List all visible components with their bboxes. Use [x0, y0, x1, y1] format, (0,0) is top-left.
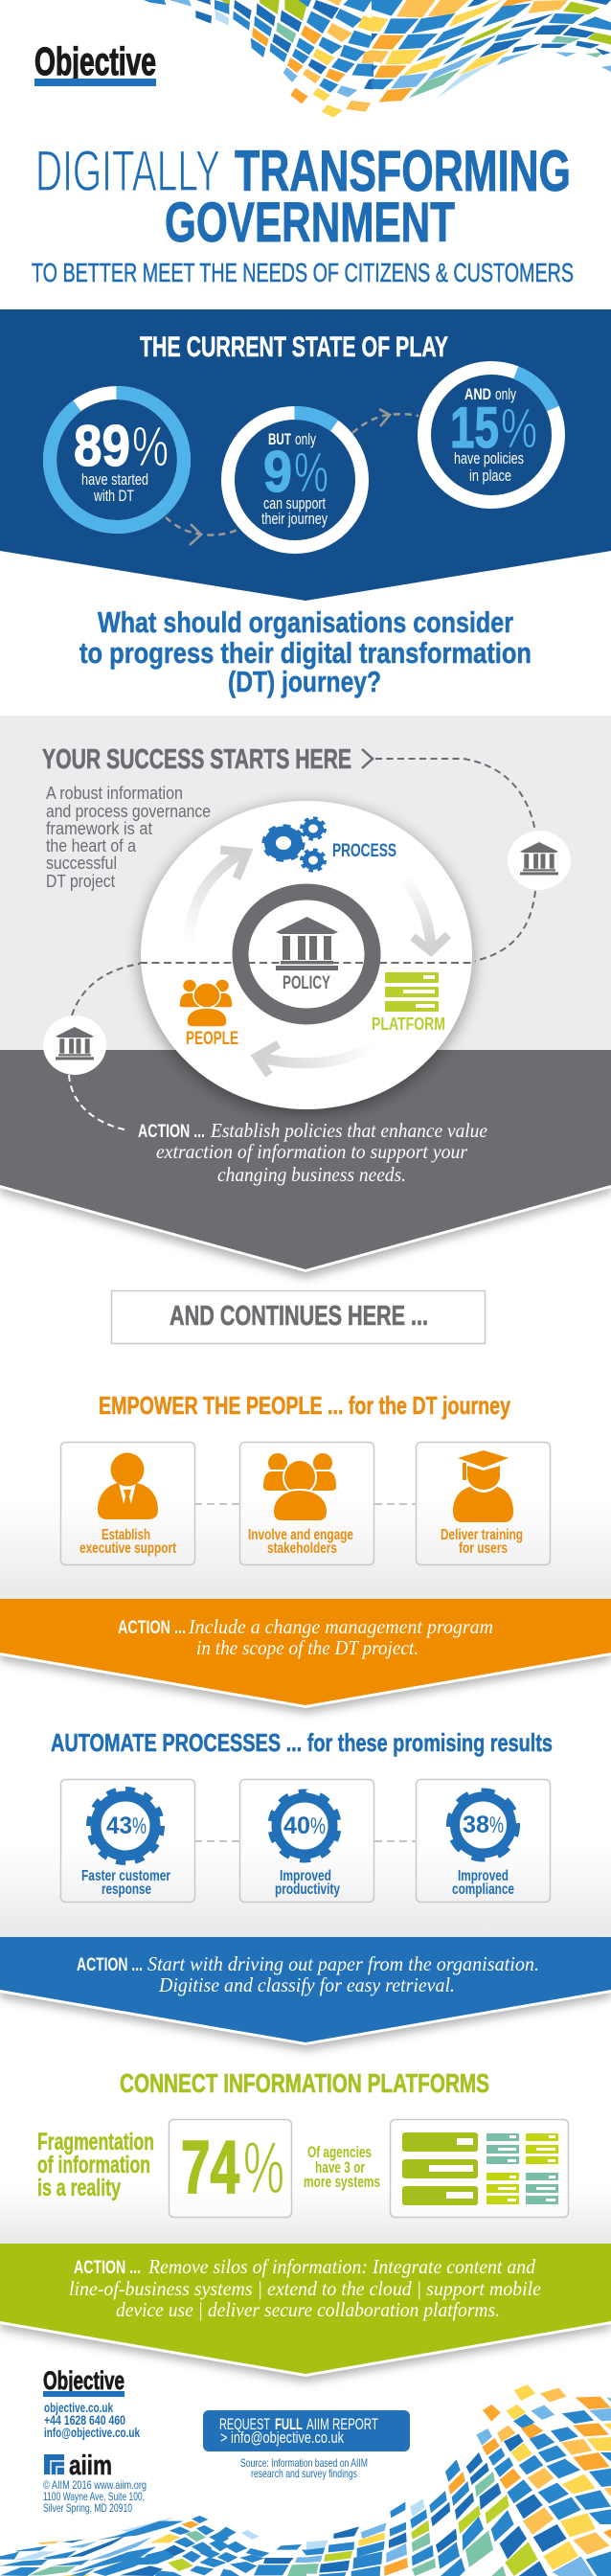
stat ring: 9%: only: [295, 431, 317, 448]
box: and continues here: AND CONTINUES HERE ...: [170, 1301, 428, 1332]
button: request report: [203, 2410, 410, 2451]
icon: platform servers: [385, 972, 439, 1012]
card: 38% improved compliance: 38: [463, 1812, 489, 1838]
title: DIGITALLY: [35, 139, 220, 203]
stat ring: 15%: 15: [450, 396, 499, 460]
title: [35, 139, 571, 254]
footer address: 1100 Wayne Ave, Suite 100,: [43, 2490, 145, 2503]
icon: small servers: [487, 2133, 558, 2204]
dashed centre line: [140, 962, 475, 964]
stat ring: 89%: with DT: [93, 487, 134, 505]
label: faster customer response: Faster customer: [81, 1868, 170, 1884]
stat ring: 9%: BUT: [268, 431, 291, 448]
label: improved productivity: Improved: [280, 1868, 331, 1884]
footer contact: objective.co.uk: [44, 2400, 113, 2415]
card: 40% improved productivity: [239, 1780, 373, 1903]
connectors: [194, 1840, 416, 1842]
button: request report: FULL: [275, 2415, 303, 2433]
action: policies: ACTION ...: [138, 1122, 205, 1142]
icon: left policy node: [43, 1015, 106, 1075]
card: 43% faster response: [61, 1780, 195, 1903]
arrow: dashed 9 to 15: [352, 409, 419, 433]
panel: orange action band: ACTION ...: [118, 1618, 186, 1638]
button: request report: REQUEST: [219, 2415, 270, 2433]
label: improved productivity: [275, 1868, 340, 1898]
label: faster customer response: response: [102, 1881, 151, 1898]
top mosaic decoration: [144, 0, 611, 118]
panel: framework circle: [140, 801, 475, 1109]
logo: aiim: [44, 2451, 112, 2481]
stat ring: 15%: AND: [464, 386, 491, 403]
panel: blue action band: [0, 1937, 611, 2042]
panel: orange action band: in the scope of the DT project.: [196, 1636, 419, 1659]
button: request report: > info@objective.co.uk: [220, 2428, 344, 2447]
label: policy: POLICY: [283, 973, 330, 993]
icon: gear 38: [448, 1790, 518, 1859]
stat ring: 15%: in place: [469, 467, 511, 485]
stat ring: 9%: their journey: [261, 510, 328, 528]
source note: Source: Information based on AIIM: [240, 2456, 368, 2470]
section gradient: processes: [0, 1846, 611, 1937]
icon: executive: [98, 1452, 158, 1519]
heading: connect information platforms: CONNECT INFORMATION PLATFORMS: [120, 2068, 489, 2098]
panel: success starts here background: [0, 716, 611, 1050]
label: establish executive support: [79, 1527, 176, 1557]
stat ring: 89%: 89: [74, 414, 130, 478]
card: servers: [391, 2119, 569, 2217]
title: GOVERNMENT: [165, 192, 455, 254]
label: involve and engage stakeholders: [248, 1527, 353, 1557]
arrow: process to platform: [405, 879, 448, 951]
panel: green action band: device use | deliver secure collaboration platforms.: [116, 2298, 500, 2321]
source note: research and survey findings: [251, 2467, 357, 2480]
stat ring: 15%: %: [501, 398, 537, 460]
action: policies: Establish policies that enhance value: [210, 1119, 487, 1142]
panel: current state of play: [0, 309, 611, 601]
icon: gear 40: [267, 1789, 342, 1863]
main circle shadow: [140, 804, 473, 1114]
card: 74%: [169, 2119, 291, 2217]
chevron shadow: [0, 1174, 611, 1278]
footer address: © AIIM 2016 www.aiim.org: [43, 2478, 147, 2492]
card: deliver training: [416, 1443, 550, 1565]
label: establish executive support: Establish: [102, 1527, 150, 1543]
card: 40% improved productivity: %: [310, 1813, 326, 1839]
label: faster customer response: [81, 1868, 170, 1898]
text block: of agencies: [304, 2143, 380, 2191]
footer contact: [44, 2400, 140, 2440]
footer logo: Objective: Objective: [43, 2366, 124, 2395]
label: people: PEOPLE: [186, 1029, 238, 1049]
card: 38% improved compliance: %: [489, 1812, 504, 1838]
arrow: platform to people: [257, 1044, 373, 1075]
footer address: Silver Spring, MD 20910: [43, 2501, 132, 2515]
stat ring: 89%: [50, 393, 184, 527]
icon: large servers: [402, 2132, 478, 2205]
panel: grey action band: [0, 1050, 611, 1269]
text block: of agencies: have 3 or: [315, 2158, 365, 2177]
card: 43% faster response: 43: [106, 1812, 132, 1839]
arrow: dashed 89 to 9: [166, 517, 238, 545]
action: policies: extraction of information to support your: [156, 1140, 468, 1163]
stat ring: 9%: 9: [263, 440, 292, 504]
label: deliver training for users: for users: [459, 1540, 508, 1557]
bottom-right mosaic decoration: [306, 2384, 611, 2576]
panel: green action band: Remove silos of information: Integrate content and: [147, 2255, 535, 2278]
panel: blue action band: Start with driving out paper from the organisation.: [147, 1952, 539, 1975]
question heading: (DT) journey?: [228, 665, 381, 698]
heading: current state of play: THE CURRENT STATE OF PLAY: [140, 331, 448, 363]
card: 38% improved compliance: [416, 1780, 550, 1903]
logo: Objective: Objective: [34, 39, 156, 83]
box: and continues here: [111, 1291, 485, 1343]
footer address: [43, 2478, 147, 2515]
icon: graduate: [453, 1450, 513, 1522]
card: 40% improved productivity: 40: [283, 1812, 310, 1839]
text block: fragmentation: Fragmentation: [37, 2129, 154, 2155]
orange band shadow: [0, 1629, 611, 1713]
stat ring: 89%: have started: [81, 470, 148, 489]
card: 74%: %: [243, 2128, 284, 2209]
text block: fragmentation: [37, 2129, 154, 2201]
text block: of agencies: Of agencies: [307, 2143, 372, 2161]
panel: orange action band: Include a change management program: [188, 1615, 493, 1638]
question heading: What should organisations consider: [98, 605, 513, 639]
action: policies: [138, 1119, 487, 1186]
logo: aiim: aiim: [69, 2451, 112, 2481]
stat ring: 9%: [228, 413, 362, 547]
card: engage stakeholders: [239, 1443, 373, 1565]
text block: fragmentation: is a reality: [37, 2175, 121, 2201]
icon: process gears: [264, 818, 325, 871]
icon: people: [179, 979, 233, 1027]
card: 74%: 74: [181, 2125, 239, 2209]
label: establish executive support: executive support: [79, 1540, 176, 1557]
stat ring: 15%: have policies: [454, 449, 524, 467]
panel: blue action band: Digitise and classify for easy retrieval.: [158, 1973, 455, 1996]
stat ring: 9%: can support: [263, 494, 326, 513]
label: process: PROCESS: [332, 841, 396, 861]
panel: blue action band: ACTION ...: [77, 1955, 143, 1975]
bottom-left mosaic decoration: [0, 2516, 306, 2576]
card: 43% faster response: %: [132, 1813, 147, 1839]
text block: governance framework: and process governance: [46, 801, 211, 821]
dashed journey path: [72, 759, 535, 1015]
action: policies: changing business needs.: [217, 1163, 406, 1186]
connectors: [194, 1503, 416, 1505]
footer contact: +44 1628 640 460: [44, 2412, 125, 2428]
text block: governance framework: framework is at: [46, 818, 152, 838]
heading: your success starts here: YOUR SUCCESS STARTS HERE: [42, 744, 351, 775]
icon: stakeholders: [262, 1452, 337, 1521]
text block: governance framework: [46, 783, 211, 891]
label: involve and engage stakeholders: Involve and engage: [248, 1527, 353, 1543]
label: deliver training for users: Deliver training: [441, 1527, 523, 1543]
footer contact: info@objective.co.uk: [44, 2425, 140, 2440]
green band shadow: [0, 2294, 611, 2382]
stat ring: 9%: %: [294, 442, 328, 504]
label: improved compliance: [452, 1868, 514, 1898]
logo: Objective: [34, 39, 156, 86]
icon: gear 43: [90, 1790, 161, 1861]
blue band shadow: [0, 1964, 611, 2050]
source note: [240, 2456, 368, 2480]
button: request report: AIIM REPORT: [306, 2415, 378, 2433]
text block: of agencies: more systems: [304, 2173, 380, 2191]
stat ring: 15%: [404, 348, 578, 522]
panel: green action band: [0, 2244, 611, 2374]
panel: green action band: line-of-business systems | extend to the cloud | support mobile: [69, 2277, 541, 2300]
question heading: [79, 605, 532, 698]
text block: governance framework: A robust information: [46, 783, 183, 803]
label: improved compliance: compliance: [452, 1881, 514, 1898]
footer logo: Objective: [43, 2366, 124, 2397]
policy ring: [240, 892, 373, 1016]
text block: governance framework: the heart of a: [46, 835, 137, 855]
panel: green action band: ACTION ...: [74, 2258, 141, 2278]
label: improved compliance: Improved: [458, 1868, 509, 1884]
stat ring: 89%: %: [132, 416, 169, 478]
card: executive support: [61, 1443, 195, 1565]
text block: governance framework: DT project: [46, 871, 115, 891]
label: involve and engage stakeholders: stakeholders: [267, 1540, 337, 1557]
stat ring: 15%: only: [495, 386, 517, 403]
label: improved productivity: productivity: [275, 1881, 340, 1898]
icon: policy building: [276, 917, 338, 970]
section gradient: people: [0, 1501, 611, 1599]
text block: governance framework: successful: [46, 853, 117, 873]
text block: fragmentation: of information: [37, 2152, 150, 2178]
label: deliver training for users: [441, 1527, 523, 1557]
panel: orange action band: [0, 1599, 611, 1705]
icon: right policy node: [508, 831, 571, 890]
arrow: people to process: [189, 850, 247, 944]
section gradient: platforms: [0, 2187, 611, 2244]
label: platform: PLATFORM: [372, 1014, 445, 1034]
